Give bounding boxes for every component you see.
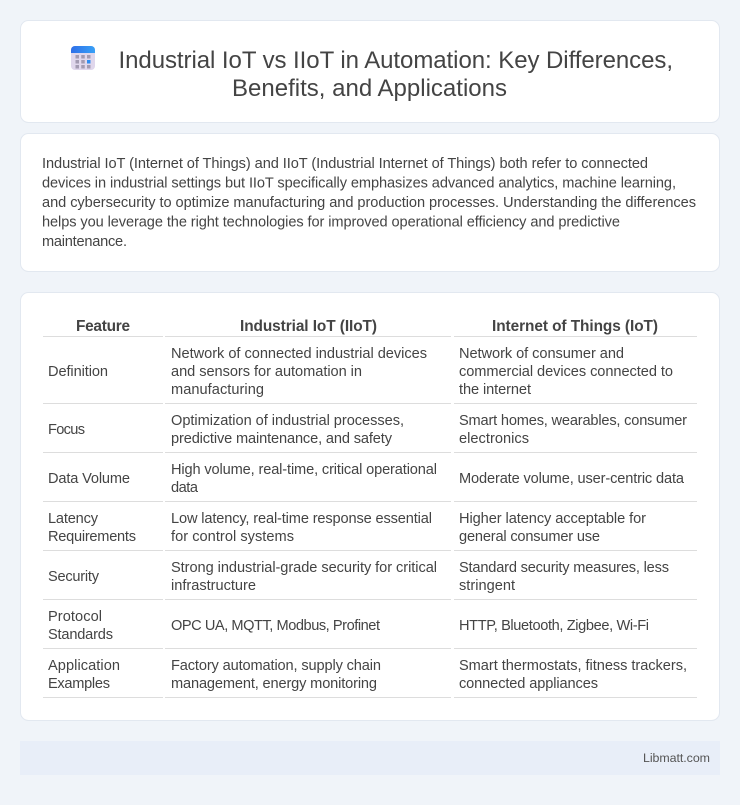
title: Industrial IoT vs IIoT in Automation: Key Differences, (118, 47, 673, 74)
row: Data Volume: Moderate volume, user-centric data (459, 471, 685, 487)
row: Latency Requirements: Low latency, real-time response essential (171, 511, 432, 527)
text block: introduction paragraph: and cybersecurity to optimize manufacturing and production processes. Understanding the differences (42, 195, 696, 211)
row: Definition: and sensors for automation in (171, 364, 362, 380)
row: Application Examples: Smart thermostats, fitness trackers, (459, 658, 687, 674)
row: Latency Requirements: Requirements (48, 529, 136, 545)
row: Security: Strong industrial-grade security for critical (171, 560, 437, 576)
row: Application Examples: Examples (48, 676, 110, 692)
footer (20, 741, 720, 775)
row: Latency Requirements: Latency (48, 511, 99, 527)
row: Definition: Definition (48, 364, 108, 380)
row: Data Volume (48, 462, 685, 496)
row: Security: stringent (459, 578, 515, 594)
footer credit: Libmatt.com (643, 751, 710, 765)
text block: introduction paragraph: Industrial IoT (Internet of Things) and IIoT (Industrial Internet of Things) both refer to connected (42, 156, 648, 172)
row: Definition: commercial devices connected to (459, 364, 673, 380)
row: Definition (48, 346, 673, 398)
panel: introduction (20, 134, 720, 272)
row: Focus: Optimization of industrial processes, (171, 413, 404, 429)
row: Definition: Network of consumer and (459, 346, 624, 362)
header: Industrial IoT (IIoT): Industrial IoT (IIoT) (240, 318, 377, 335)
row: Protocol Standards: HTTP, Bluetooth, Zigbee, Wi-Fi (459, 618, 649, 634)
row: Data Volume: High volume, real-time, critical operational (171, 462, 437, 478)
row: Definition: manufacturing (171, 382, 264, 398)
row: Protocol Standards: Protocol (48, 609, 102, 625)
row: Protocol Standards (48, 609, 649, 643)
row: Application Examples: connected appliances (459, 676, 598, 692)
row: Focus: Smart homes, wearables, consumer (459, 413, 687, 429)
text block: introduction paragraph: maintenance. (42, 234, 127, 250)
row: Definition: Network of connected industrial devices (171, 346, 427, 362)
row: Focus (48, 413, 687, 447)
text block: introduction paragraph (42, 156, 696, 250)
row: Focus: electronics (459, 431, 529, 447)
row: Latency Requirements (48, 511, 646, 545)
row: Protocol Standards: Standards (48, 627, 113, 643)
row: Focus: predictive maintenance, and safety (171, 431, 393, 447)
header: Internet of Things (IoT): Internet of Things (IoT) (492, 318, 658, 335)
panel: header (20, 20, 720, 122)
row: Security: infrastructure (171, 578, 256, 594)
row: Focus: Focus (48, 422, 85, 438)
table header row (76, 318, 658, 335)
title (118, 47, 673, 102)
row: Security (48, 560, 669, 594)
icon: calendar (71, 46, 95, 70)
row: Latency Requirements: Higher latency acceptable for (459, 511, 646, 527)
row: Application Examples (48, 658, 687, 692)
row: Latency Requirements: general consumer use (459, 529, 600, 545)
text block: introduction paragraph: devices in industrial settings but IIoT specifically emphasizes advanced analytics, machine learning, (42, 176, 676, 192)
row: Security: Standard security measures, less (459, 560, 669, 576)
text block: introduction paragraph: helps you leverage the right technologies for improved operational efficiency and predictive (42, 214, 620, 230)
title: Benefits, and Applications (232, 75, 507, 102)
row: Security: Security (48, 569, 100, 585)
row: Application Examples: Factory automation, supply chain (171, 658, 381, 674)
row: Application Examples: management, energy monitoring (171, 676, 377, 692)
row: Latency Requirements: for control systems (171, 529, 294, 545)
row: Data Volume: Data Volume (48, 471, 130, 487)
panel: comparison table (20, 292, 720, 720)
row: Data Volume: data (171, 480, 199, 496)
row: Protocol Standards: OPC UA, MQTT, Modbus, Profinet (171, 618, 380, 634)
row: Application Examples: Application (48, 658, 120, 674)
row: Definition: the internet (459, 382, 531, 398)
header: Feature: Feature (76, 318, 130, 335)
